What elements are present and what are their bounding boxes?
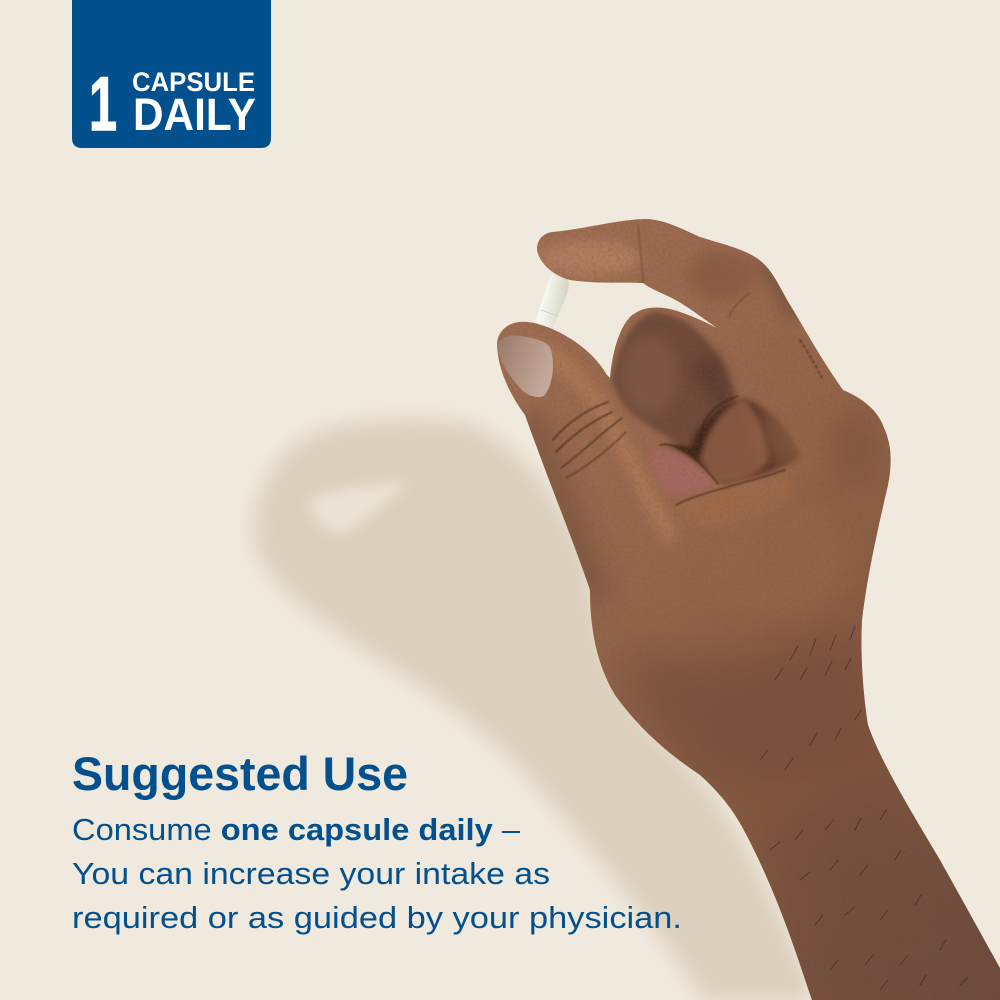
text block: usage instructions: You can increase your intake as	[72, 856, 550, 891]
badge word: daily: DAILY	[133, 89, 256, 140]
text block: usage instructions: required or as guided by your physician.	[72, 900, 682, 935]
hand shadow on background	[255, 419, 815, 1000]
skin grain	[498, 219, 941, 862]
thumbnail	[497, 335, 553, 397]
badge numeral: 1	[89, 62, 117, 147]
badge: 1 capsule daily	[72, 0, 271, 148]
badge word: capsule: CAPSULE	[132, 67, 255, 97]
skin highlights and shadows	[530, 240, 1000, 1000]
icon: capsule held between fingers	[535, 273, 569, 330]
hand holding capsule	[490, 210, 1000, 1000]
arm hair	[760, 626, 968, 990]
heading: suggested use: Suggested Use	[72, 747, 408, 800]
text block: usage instructions: Consume one capsule daily –	[72, 812, 521, 847]
text block: usage instructions	[72, 812, 682, 935]
skin creases	[553, 225, 822, 505]
